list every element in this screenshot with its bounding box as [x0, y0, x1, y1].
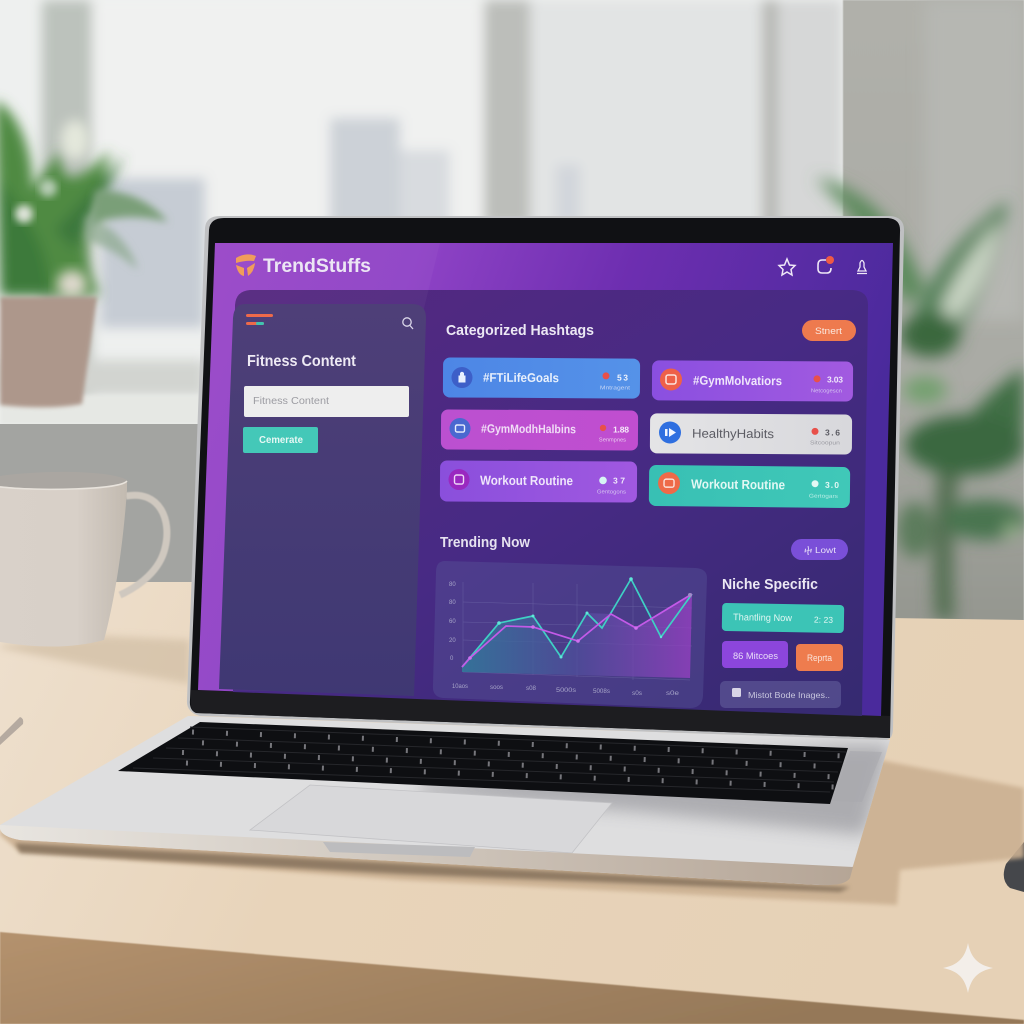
notch [323, 842, 475, 857]
hashtag card 3: Senmpnes [599, 437, 626, 444]
app header [236, 254, 867, 277]
hashtag card 5: 37 [613, 475, 625, 486]
teal trend line [462, 577, 692, 667]
sidebar [219, 304, 426, 696]
icon: notification [818, 256, 834, 273]
niche item: Trending Now: 2: 23 [814, 615, 833, 625]
y axis labels: 20 [449, 638, 456, 644]
screen glare [198, 243, 440, 692]
hashtag card 2 [652, 360, 853, 402]
niche item: Mistcoes: 86 Mitcoes [733, 651, 779, 661]
hashtag card 6: Gertogars [809, 494, 838, 500]
x axis labels: s0e [666, 691, 680, 697]
hashtag card 2: 3.03 [827, 374, 843, 385]
icon: search [403, 318, 413, 329]
plant: left potted plant [0, 100, 168, 407]
button: Generate [243, 427, 318, 453]
niche item: Mistot Bode: Mistot Bode Inages.. [748, 690, 830, 700]
icon: menu [246, 314, 273, 325]
niche item: Trending Now: Thantling Now [733, 612, 792, 624]
icon: terracotta pot [0, 297, 97, 407]
y axis labels: 80 [449, 582, 456, 588]
plant: right blurred plant [815, 178, 1024, 620]
heading: Categorized Hashtags: Categorized Hashtags [446, 322, 594, 339]
hashtag card 4 [650, 413, 852, 455]
y axis labels: 80 [449, 600, 456, 606]
line chart panel [433, 561, 707, 708]
hashtag card 5 [440, 460, 637, 503]
background: window and wall [0, 0, 1024, 630]
deck shading [420, 745, 890, 835]
hashtag card 4: Sitcoopun [810, 440, 840, 447]
button: sort [802, 320, 856, 341]
hashtag card 1: Mntragent [600, 385, 631, 392]
y axis labels: 60 [449, 619, 456, 625]
niche item: Mistcoes [722, 641, 788, 668]
hashtag card 2: Netcogescn [811, 388, 842, 395]
x axis labels: 5008s [593, 689, 610, 695]
chart area fill [462, 594, 692, 678]
button: Generate: Cemerate [259, 435, 303, 446]
screen [198, 243, 893, 716]
hashtag card 5: Gentogons [597, 489, 626, 496]
hashtag card 4: HealthyHabits [692, 427, 774, 441]
x axis labels: 10aos [452, 684, 468, 690]
button: live [791, 539, 848, 560]
y axis labels: 0 [450, 656, 454, 662]
button: live: ⴕ Lowt [804, 545, 837, 556]
hashtag card 1: #FTiLifeGoals [483, 371, 559, 385]
hashtag card 1 [443, 357, 640, 399]
x axis labels: s08 [526, 686, 537, 692]
heading: Trending Now: Trending Now [440, 534, 530, 551]
main panel [233, 290, 868, 716]
x axis labels [452, 684, 680, 697]
pen [0, 717, 23, 745]
heading: Niche Specific: Niche Specific [722, 576, 818, 593]
input field [244, 386, 409, 417]
niche item: Reports: Reprta [807, 653, 832, 663]
hashtag card 2: #GymMolvatiors [693, 374, 782, 388]
hashtag card 1: 53 [617, 372, 628, 383]
purple trend line [462, 593, 692, 667]
hashtag card 4: 3.6 [825, 427, 840, 438]
x axis labels: soos [490, 685, 503, 691]
input field: Fitness Content [253, 395, 329, 407]
icon: sparkle watermark [943, 943, 993, 993]
desk [0, 582, 1024, 1024]
niche item: Reports [796, 644, 843, 671]
button: sort: Stnert [815, 326, 843, 336]
niche item: Trending Now [722, 603, 844, 633]
icon: logo [236, 254, 256, 276]
laptop lid [187, 216, 904, 740]
x axis labels: 5000s [556, 688, 576, 694]
icon: bell [857, 260, 867, 274]
phone [1004, 842, 1024, 892]
hashtag card 5: Workout Routine [480, 473, 573, 488]
front lip [0, 825, 853, 885]
hashtag card 3: 1.88 [613, 424, 629, 435]
hashtag card 6 [649, 465, 850, 508]
hashtag card 6: 3.0 [825, 480, 839, 490]
x axis labels: s0s [632, 691, 642, 697]
speaker grille [833, 751, 882, 802]
icon: star [779, 259, 795, 275]
heading: Fitness Content: Fitness Content [247, 353, 356, 370]
trackpad [250, 785, 612, 853]
keyboard [118, 722, 848, 804]
laptop base [0, 716, 890, 885]
icon: coffee mug [0, 472, 190, 684]
laptop shadow [0, 760, 1024, 905]
hashtag card 3: #GymModhHalbins [481, 422, 576, 436]
hashtag card 6: Workout Routine [691, 476, 785, 492]
title: TrendStuffs: TrendStuffs [263, 255, 371, 277]
niche item: Mistot Bode [720, 681, 841, 708]
y axis labels [449, 582, 456, 662]
hashtag card 3 [441, 409, 638, 451]
